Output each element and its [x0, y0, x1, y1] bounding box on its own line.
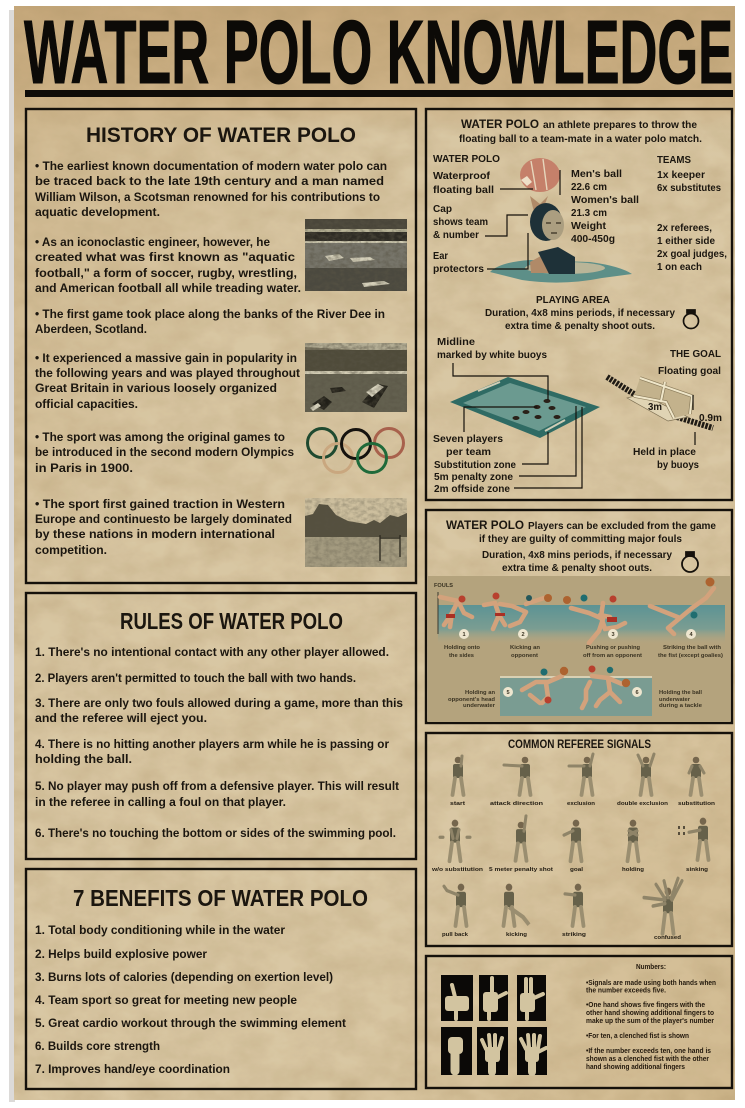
list: rules: 4. There is no hitting another players arm while he is passing or: [35, 737, 389, 751]
labels: pool: Seven players: [433, 434, 503, 445]
text block: numbers explanation: the number exceeds five.: [586, 988, 666, 994]
labels: ball specs: 400-450g: [571, 234, 615, 245]
list: benefits: 1. Total body conditioning while in the water: [35, 923, 285, 937]
captions: signals: [431, 801, 716, 941]
list: rules: holding the ball.: [35, 752, 132, 766]
swimmers: foul 5: [522, 667, 568, 704]
labels: equipment: Cap: [433, 204, 452, 215]
text block: numbers explanation: shown as a clenched fist with the other: [586, 1056, 709, 1063]
number badges: [459, 629, 696, 697]
leader lines: pool: [453, 363, 582, 488]
captions: fouls: underwater: [659, 697, 691, 703]
text block: history paragraph 5: be introduced in the second modern Olympics: [35, 445, 294, 459]
text block: history paragraph 5: • The sport was among the original games to: [35, 430, 285, 444]
text block: history paragraph 5: in Paris in 1900.: [35, 461, 133, 475]
leader lines: equipment: [485, 170, 560, 269]
labels: equipment: Waterproof: [433, 171, 491, 182]
text block: numbers explanation: other hand showing additional fingers to: [586, 1010, 714, 1017]
photo: early match: [305, 219, 407, 291]
list: rules: 1. There's no intentional contact with any other player allowed.: [35, 645, 389, 659]
numbers: [462, 632, 694, 696]
photo: crowded pool: [305, 343, 407, 412]
captions: signals: goal: [570, 867, 584, 873]
captions: fouls: the fist (except goalies): [658, 653, 723, 659]
swimmers: foul 1: [440, 596, 472, 627]
text block: history paragraph 4: • It experienced a massive gain in popularity in: [35, 351, 297, 365]
illustration: floating goal: [607, 377, 722, 445]
text block: fouls intro: Duration, 4x8 mins periods, if necessary: [482, 550, 672, 561]
text block: history paragraph 4: Great Britain in various loosely organized: [35, 381, 277, 395]
labels: goal: by buoys: [657, 460, 699, 471]
captions: fouls: off from an opponent: [583, 653, 642, 659]
panel: benefits of water polo: [26, 869, 416, 1089]
labels: teams: 2x goal judges,: [657, 249, 727, 260]
text block: intro: floating ball to a team-mate in a water polo match.: [459, 134, 702, 145]
labels: teams: 1 either side: [657, 236, 715, 247]
text block: history paragraph 3: Aberdeen, Scotland.: [35, 322, 147, 336]
labels: equipment: Ear: [433, 251, 448, 262]
list: benefits: 3. Burns lots of calories (depending on exertion level): [35, 970, 333, 984]
captions: fouls: the sides: [449, 653, 474, 659]
text block: numbers explanation: •If the number exceeds ten, one hand is: [586, 1048, 711, 1055]
labels: pool: [433, 337, 547, 495]
captions: signals: double exclusion: [617, 801, 669, 807]
text block: history paragraph 6: by these nations in modern international: [35, 527, 275, 541]
labels: equipment: & number: [433, 230, 479, 241]
labels: pool: 5m penalty zone: [434, 472, 513, 483]
panel: common referee signals: [426, 733, 732, 946]
captions: fouls: Pushing or pushing: [586, 645, 641, 651]
text block: fouls intro: [446, 518, 716, 574]
panel: rules of water polo: [26, 593, 416, 859]
list: rules: [35, 645, 403, 840]
text block: history paragraph 2: and American football all while treading water.: [35, 281, 301, 295]
labels: teams: TEAMS: [657, 155, 691, 166]
text block: history paragraph 6: competition.: [35, 543, 107, 557]
captions: signals: w/o substitution: [431, 867, 484, 873]
text block: history paragraph 1: William Wilson, a Scotsman renowned for his contributions to: [35, 190, 380, 204]
list: rules: 2. Players aren't permitted to touch the ball with two hands.: [35, 671, 356, 685]
labels: teams: 2x referees,: [657, 223, 712, 234]
text block: intro: an athlete prepares to throw the: [543, 120, 697, 131]
text block: history paragraph 5: [35, 430, 294, 475]
text block: history paragraph 6: [35, 497, 292, 557]
panel: fouls: [426, 510, 732, 723]
captions: signals: substitution: [678, 801, 716, 807]
text block: numbers explanation: •One hand shows five fingers with the: [586, 1002, 705, 1009]
text block: history paragraph 3: • The first game took place along the banks of the River Dee in: [35, 307, 385, 321]
captions: signals: 5 meter penalty shot: [489, 867, 553, 873]
text block: intro: WATER POLO: [461, 117, 539, 131]
text block: fouls intro: WATER POLO: [446, 518, 524, 532]
text block: history paragraph 6: • The sport first gained traction in Western: [35, 497, 285, 511]
text block: history paragraph 4: the following years and was played throughout: [35, 366, 300, 380]
captions: fouls: underwater: [463, 703, 496, 709]
list: benefits: 2. Helps build explosive power: [35, 947, 207, 961]
text block: history paragraph 3: [35, 307, 385, 336]
text block: history paragraph 2: created what was first known as "aquatic: [35, 250, 295, 264]
labels: goal: Floating goal: [658, 366, 721, 377]
text block: fouls intro: extra time & penalty shoot outs.: [502, 563, 652, 574]
panel: history of water polo: [26, 109, 416, 583]
labels: pool: 2m offside zone: [434, 484, 510, 495]
list: rules: 3. There are only two fouls allowed during a game, more than this: [35, 696, 403, 710]
text block: numbers explanation: •For ten, a clenched fist is shown: [586, 1033, 689, 1040]
text block: numbers explanation: [586, 964, 716, 1071]
chart: fouls illustration: [428, 576, 730, 722]
figures: row 1: [452, 754, 704, 795]
heading: benefits: 7 BENEFITS OF WATER POLO: [73, 885, 368, 911]
text block: history paragraph 2: • As an iconoclastic engineer, however, he: [35, 235, 270, 249]
text block: history paragraph 6: Europe and continuesto be largely dominated: [35, 512, 292, 526]
figures: row 2: [440, 816, 708, 861]
captions: signals: start: [450, 801, 465, 807]
captions: signals: sinking: [686, 867, 709, 873]
labels: pool: marked by white buoys: [437, 350, 547, 361]
text block: numbers explanation: Numbers:: [636, 964, 666, 971]
swimmers: foul 4: [650, 578, 714, 634]
heading: history: HISTORY OF WATER POLO: [86, 124, 356, 147]
text block: history paragraph 2: [35, 235, 301, 295]
captions: fouls: [444, 645, 723, 709]
labels: goal: THE GOAL: [670, 349, 722, 360]
labels: equipment: WATER POLO: [433, 154, 500, 165]
captions: signals: exclusion: [567, 801, 596, 807]
list: rules: 6. There's no touching the bottom or sides of the swimming pool.: [35, 826, 396, 840]
captions: signals: attack direction: [490, 801, 544, 807]
text block: fouls intro: if they are guilty of committing major fouls: [479, 534, 682, 545]
text block: numbers explanation: •Signals are made using both hands when: [586, 980, 716, 987]
text block: history paragraph 2: football," a form of soccer, rugby, wrestling,: [35, 266, 297, 280]
list: benefits: [35, 923, 346, 1076]
labels: ball specs: Women's ball: [571, 195, 639, 206]
labels: equipment: floating ball: [433, 185, 494, 196]
icons: hand signs: [441, 975, 547, 1075]
captions: signals: pull back: [442, 932, 469, 938]
text block: history paragraph 4: [35, 351, 300, 411]
figures: row 3: [444, 878, 682, 934]
text block: numbers explanation: make up the sum of the player's number: [586, 1018, 714, 1025]
labels: equipment: shows team: [433, 217, 488, 228]
labels: teams: 1 on each: [657, 262, 702, 273]
labels: pool: Midline: [437, 337, 475, 348]
list: rules: in the referee in calling a foul on that player.: [35, 795, 286, 809]
numbers: 3: [612, 632, 615, 638]
list: rules: 5. No player may push off from a defensive player. This will result: [35, 779, 399, 793]
text block: history paragraph 1: be traced back to the late 19th century and a man named: [35, 174, 384, 188]
captions: fouls: Kicking an: [510, 645, 541, 651]
icon: olympic rings: [308, 428, 404, 472]
captions: fouls: Holding an: [465, 690, 496, 696]
labels: teams: 6x substitutes: [657, 183, 721, 194]
captions: fouls: during a tackle: [659, 703, 702, 709]
swimmers: foul 2: [484, 592, 552, 629]
icon: stopwatch: [682, 552, 698, 572]
photo: lake match: [305, 498, 407, 567]
illustration: player with ball: [490, 158, 632, 283]
list: benefits: 5. Great cardio workout through the swimming element: [35, 1016, 346, 1030]
panel: water polo anatomy and playing area: [426, 109, 732, 500]
labels: teams: [657, 155, 727, 273]
numbers: 6: [636, 690, 639, 696]
text block: playing area: [485, 295, 675, 332]
captions: fouls: Striking the ball with: [663, 645, 722, 651]
labels: ball specs: [571, 169, 639, 245]
labels: teams: 1x keeper: [657, 170, 705, 181]
text block: fouls intro: Players can be excluded from the game: [528, 521, 716, 532]
labels: pool: per team: [446, 447, 491, 458]
text block: playing area: extra time & penalty shoot outs.: [505, 321, 655, 332]
text block: history paragraph 1: aquatic development.: [35, 205, 160, 219]
labels: goal: [633, 349, 722, 471]
text block: intro: [459, 117, 702, 145]
text block: history paragraph 1: [35, 159, 387, 219]
text block: numbers explanation: hand showing additional fingers: [586, 1064, 685, 1071]
numbers: 2: [522, 632, 525, 638]
heading: referee signals: COMMON REFEREE SIGNALS: [508, 737, 651, 751]
illustration: pool: [450, 377, 600, 438]
swimmers: foul 3: [563, 594, 625, 643]
heading: rules: RULES OF WATER POLO: [120, 608, 343, 634]
labels: pool: Substitution zone: [434, 460, 516, 471]
icon: stopwatch: [684, 310, 698, 328]
labels: ball specs: 22.6 cm: [571, 182, 607, 193]
text block: history paragraph 1: • The earliest known documentation of modern water polo can: [35, 159, 387, 173]
captions: fouls: opponent's head: [448, 697, 496, 703]
list: benefits: 7. Improves hand/eye coordination: [35, 1062, 230, 1076]
text block: playing area: Duration, 4x8 mins periods, if necessary: [485, 308, 675, 319]
chart: fouls illustration: FOULS: [434, 583, 453, 589]
captions: signals: confused: [654, 935, 682, 941]
list: benefits: 4. Team sport so great for meeting new people: [35, 993, 297, 1007]
captions: fouls: Holding onto: [444, 645, 481, 651]
labels: ball specs: Men's ball: [571, 169, 622, 180]
labels: equipment: [433, 154, 500, 275]
captions: fouls: opponent: [511, 653, 538, 659]
captions: fouls: Holding the ball: [659, 690, 702, 696]
illustration: floating goal: 0.9m: [699, 413, 722, 424]
illustration: floating goal: 3m: [648, 402, 662, 413]
captions: signals: striking: [562, 932, 587, 938]
numbers: 4: [690, 632, 694, 638]
text block: playing area: PLAYING AREA: [536, 295, 610, 306]
labels: goal: Held in place: [633, 447, 696, 458]
captions: signals: kicking: [506, 932, 528, 938]
numbers: 5: [506, 690, 510, 696]
text block: history paragraph 4: official capacities.: [35, 397, 138, 411]
labels: equipment: protectors: [433, 264, 484, 275]
labels: ball specs: 21.3 cm: [571, 208, 607, 219]
list: benefits: 6. Builds core strength: [35, 1039, 160, 1053]
numbers: 1: [462, 632, 466, 638]
list: rules: and the referee will eject you.: [35, 711, 207, 725]
labels: ball specs: Weight: [571, 221, 607, 232]
captions: signals: holding: [622, 867, 645, 873]
swimmers: foul 6: [582, 666, 630, 708]
panel: hand number signals: [426, 956, 732, 1088]
